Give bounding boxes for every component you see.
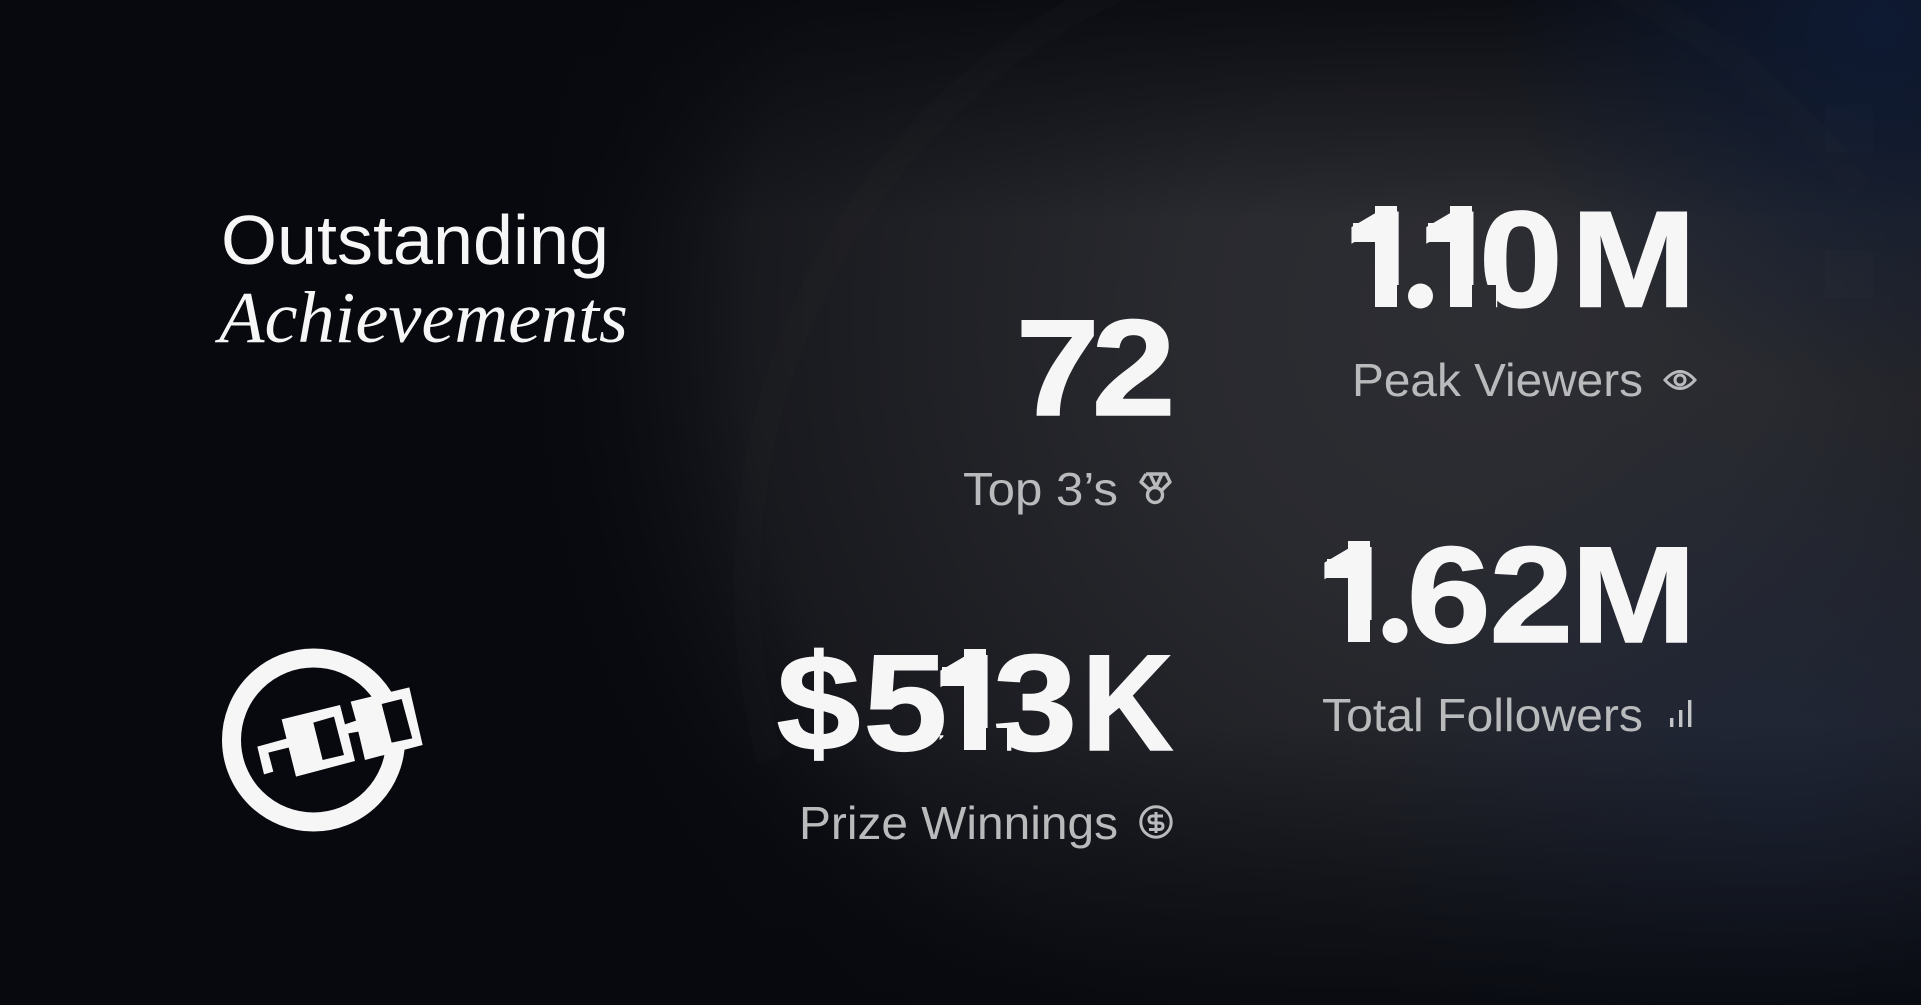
stat: prize winnings: Prize Winnings xyxy=(799,797,1118,849)
logo: seat belt in circle xyxy=(232,658,423,822)
stat: total followers xyxy=(1323,541,1692,732)
icon: dollar xyxy=(1141,807,1171,837)
stat: peak viewers: Peak Viewers xyxy=(1352,354,1643,406)
stat: top 3s: Top 3’s xyxy=(963,463,1118,515)
title: Achievements xyxy=(215,277,628,358)
stat: top 3s: 72 xyxy=(1016,291,1176,444)
title: Outstanding xyxy=(221,201,609,279)
stat: prize winnings xyxy=(777,626,1173,849)
stat: prize winnings: $513 xyxy=(777,626,1077,779)
stat: peak viewers: 1.10M xyxy=(1342,183,1696,336)
stat: peak viewers xyxy=(1351,206,1697,396)
stat: top 3s xyxy=(963,291,1176,515)
stat: total followers: Total Followers xyxy=(1322,689,1643,741)
icon: bars xyxy=(1670,700,1691,727)
icon: eye xyxy=(1665,372,1695,388)
stat: total followers: 1.62M xyxy=(1315,518,1696,671)
icon: medal xyxy=(1141,474,1170,502)
title xyxy=(215,201,628,358)
stat: prize winnings: K xyxy=(1082,626,1173,779)
